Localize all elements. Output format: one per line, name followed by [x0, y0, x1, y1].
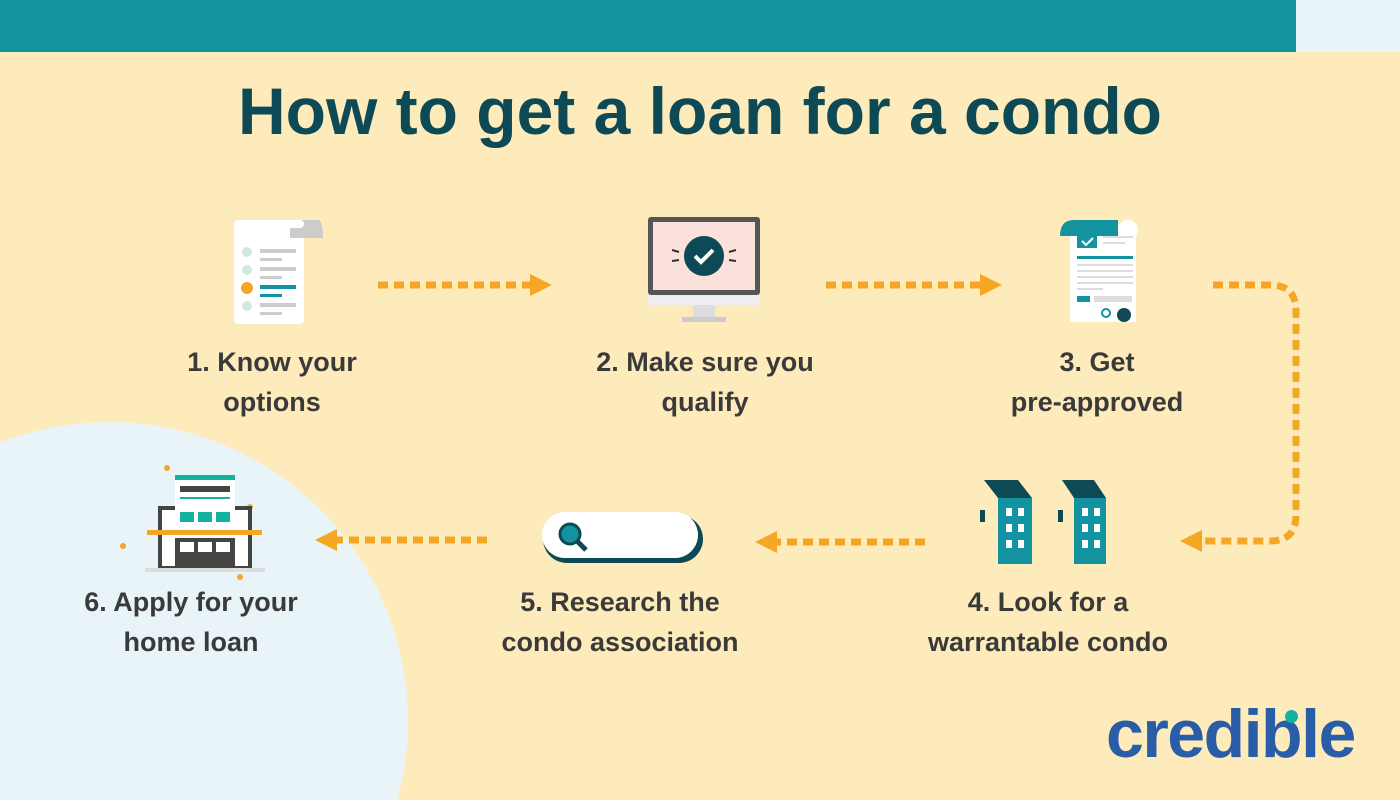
icon: checklist — [234, 220, 323, 324]
label 3: pre-approved — [1011, 387, 1183, 417]
label 2 — [596, 347, 814, 417]
label 1: options — [223, 387, 321, 417]
logo: credible: credible — [1106, 696, 1355, 772]
label 5: 5. Research the — [520, 587, 720, 617]
label 6: home loan — [123, 627, 258, 657]
label 4 — [928, 587, 1168, 657]
icon: search bar — [542, 512, 703, 563]
label 6 — [84, 587, 298, 657]
icon: buildings — [980, 480, 1106, 564]
label 2: 2. Make sure you — [596, 347, 814, 377]
label 5 — [501, 587, 739, 657]
label 5: condo association — [501, 627, 739, 657]
icon: pre-approval certificate — [1060, 220, 1138, 322]
label 3 — [1011, 347, 1183, 417]
title: How to get a loan for a condo — [238, 74, 1162, 148]
label 1 — [187, 347, 357, 417]
label 6: 6. Apply for your — [84, 587, 298, 617]
label 3: 3. Get — [1059, 347, 1135, 377]
label 2: qualify — [661, 387, 748, 417]
top bar corner — [1296, 0, 1400, 52]
logo dot — [1285, 710, 1298, 723]
label 4: 4. Look for a — [968, 587, 1128, 617]
icon: loan application laptop — [120, 465, 265, 580]
icon: monitor — [648, 217, 760, 322]
label 1: 1. Know your — [187, 347, 357, 377]
top bar — [0, 0, 1296, 52]
label 4: warrantable condo — [928, 627, 1168, 657]
